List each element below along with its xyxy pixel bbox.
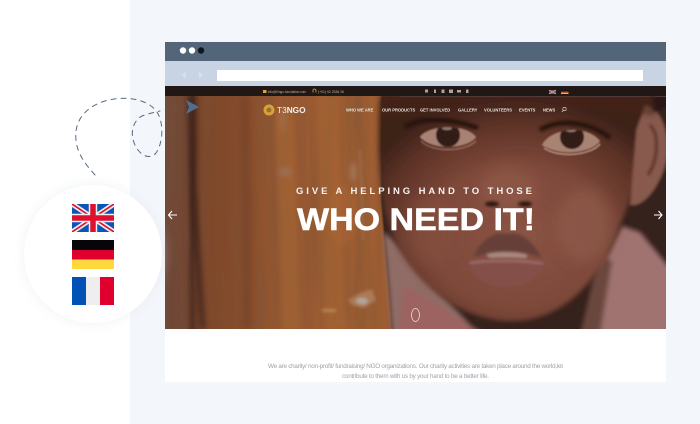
hero subtitle: GIVE A HELPING HAND TO THOSE <box>296 186 532 197</box>
intro text block <box>165 329 666 382</box>
ear <box>630 105 668 205</box>
site navigation: EVENTS <box>519 108 536 112</box>
social icons <box>425 90 468 93</box>
mouth <box>468 233 544 287</box>
hero photo <box>160 90 670 335</box>
language selector circle <box>24 185 162 323</box>
intro text block: contribute to them with us by your hand to be a better life. <box>342 373 489 380</box>
hero title: WHO NEED IT! <box>297 201 535 237</box>
child face <box>379 96 670 321</box>
clothing <box>383 226 670 335</box>
site navigation: GET INVOLVED <box>420 108 450 112</box>
cheek highlight <box>565 190 612 258</box>
site navigation <box>346 107 566 112</box>
dashed flight path with arrow <box>76 98 199 175</box>
intro text block: We are charity/ non-profit/ fundraising/ NGO organizations. Our charity activities are taken place around the world,let <box>268 363 563 370</box>
flag: Germany <box>72 240 114 269</box>
site navigation: GALLERY <box>458 108 478 112</box>
slider arrow left <box>168 211 177 219</box>
site navigation: OUR PRODUCTS <box>382 108 415 112</box>
wood door <box>160 90 400 335</box>
slider indicator <box>412 308 420 322</box>
site navigation: NEWS <box>543 108 556 112</box>
left eye <box>405 120 478 150</box>
flag: United Kingdom <box>72 204 114 232</box>
site logo: T3NGO <box>277 105 306 115</box>
site top bar: info@t3ngo-foundation.com <box>268 90 306 94</box>
flag: France <box>72 277 114 305</box>
site navigation: WHO WE ARE <box>346 108 374 112</box>
language flags small <box>549 90 568 94</box>
browser address bar <box>165 61 666 86</box>
nose <box>484 172 533 208</box>
dark background behind child <box>381 96 670 335</box>
icon: paper plane arrow <box>186 100 199 114</box>
site navigation: VOLUNTEERS <box>484 108 512 112</box>
right eye <box>540 123 610 154</box>
top head shadow <box>381 96 655 118</box>
browser window <box>160 42 670 382</box>
site logo <box>264 104 306 116</box>
slider arrow right <box>654 211 662 219</box>
site top bar <box>165 86 666 96</box>
site top bar: (+01) 92 2536 26 <box>318 90 344 94</box>
browser title bar <box>165 42 666 61</box>
